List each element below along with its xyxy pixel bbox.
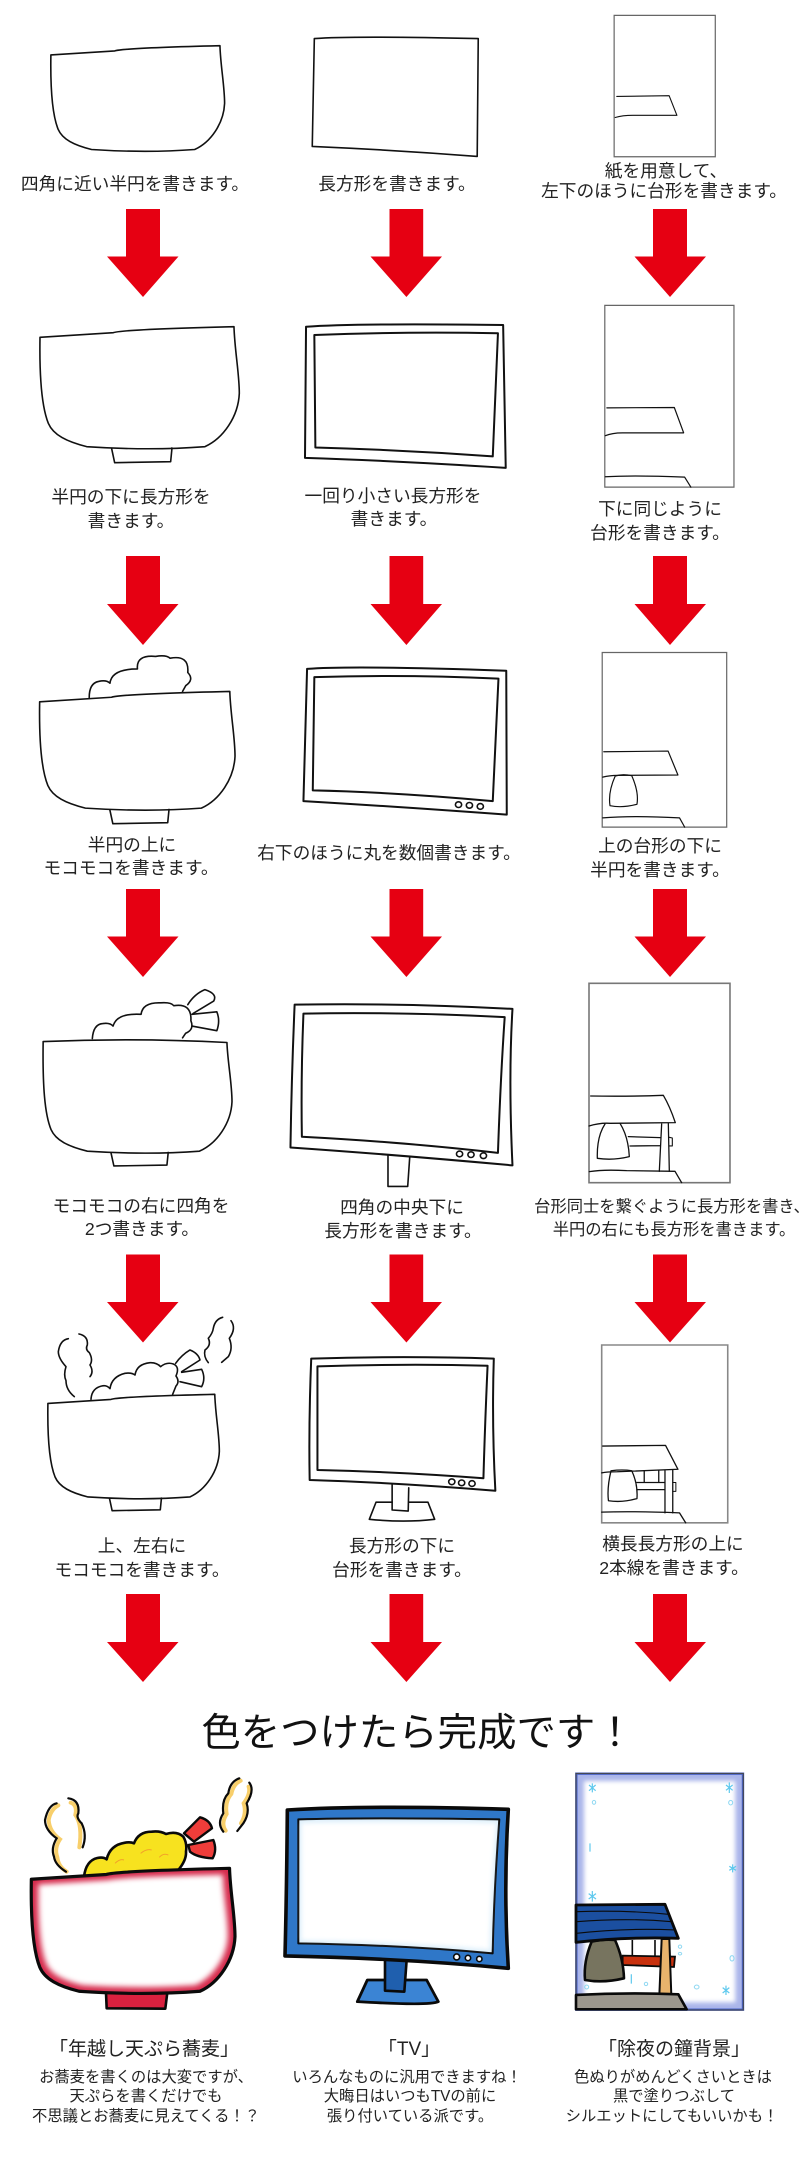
arrow: [634, 1594, 706, 1682]
drawing: bowl and foot: [40, 691, 235, 824]
item description: 天ぷらを書くだけでも: [70, 2088, 222, 2105]
caption: 下に同じように: [598, 499, 722, 519]
step 3: bowl with tempura cloud: [40, 656, 235, 878]
item description: お蕎麦を書くのは大変ですが、: [39, 2069, 253, 2086]
arrow: [634, 1254, 706, 1342]
item title: 「年越し天ぷら蕎麦」: [49, 2038, 239, 2060]
item description: [32, 2069, 260, 2125]
drawing: paper with second trapezoid: [605, 305, 734, 487]
heading: 色をつけたら完成です！: [201, 1711, 635, 1755]
drawing: bowl and foot: [43, 1040, 232, 1166]
caption: [53, 1196, 229, 1239]
caption: [332, 1536, 472, 1580]
caption: [305, 486, 481, 529]
step 5: TV with base: [309, 1357, 495, 1580]
step 1: TV rectangle: [312, 37, 478, 194]
caption: 上の台形の下に: [598, 836, 722, 856]
caption: 長方形を書きます。: [324, 1221, 482, 1241]
arrow: [370, 1254, 442, 1342]
arrow: [107, 1594, 178, 1682]
arrow: [634, 889, 706, 977]
drawing: TV and stand post: [290, 1004, 512, 1186]
drawing: paper, trapezoids, bell: [602, 652, 727, 827]
arrow: [370, 1594, 442, 1682]
drawing: TV with three buttons: [303, 667, 507, 815]
step 3: paper with bell: [590, 652, 730, 880]
step 1: bowl half circle: [21, 46, 249, 194]
caption: 長方形を書きます。: [318, 174, 476, 194]
finished: soba bowl panel: [31, 1778, 260, 2125]
step 4: paper with pillars: [534, 983, 807, 1239]
caption: モコモコを書きます。: [54, 1560, 230, 1580]
item description: 不思議とお蕎麦に見えてくる！？: [32, 2107, 260, 2125]
colored illustration: temple bell background: [576, 1773, 743, 2010]
arrow: [370, 556, 442, 645]
caption: 半円の上に: [88, 835, 176, 855]
caption: [534, 1198, 807, 1239]
caption: 紙を用意して、: [605, 161, 727, 181]
caption: 書きます。: [88, 511, 174, 531]
drawing: rectangle: [312, 37, 478, 156]
caption: [599, 1534, 749, 1578]
arrow: [107, 209, 178, 297]
drawing: belfry outline: [589, 983, 730, 1183]
step 1: paper and trapezoid: [541, 15, 787, 201]
caption: 右下のほうに丸を数個書きます。: [257, 843, 521, 863]
caption: [324, 1198, 482, 1241]
drawing: paper with trapezoid: [614, 15, 715, 157]
caption: 左下のほうに台形を書きます。: [541, 181, 787, 201]
step 4: bowl with shrimp tail: [43, 990, 232, 1239]
caption: [54, 1536, 230, 1580]
caption: 半円の右にも長方形を書きます。: [553, 1221, 795, 1239]
caption: [541, 161, 787, 201]
item description: [566, 2069, 778, 2125]
caption: 上、左右に: [98, 1536, 186, 1556]
drawing: TV, stand and base: [309, 1357, 495, 1521]
step 2: TV inner rectangle: [305, 324, 506, 529]
drawing: bowl and foot: [40, 327, 239, 463]
caption: 書きます。: [351, 509, 437, 529]
caption: 台形同士を繋ぐように長方形を書き、: [534, 1198, 807, 1216]
item description: 黒で塗りつぶして: [613, 2088, 735, 2105]
item description: 色ぬりがめんどくさいときは: [574, 2069, 772, 2086]
drawing: bowl and foot: [48, 1394, 219, 1511]
item description: いろんなものに汎用できますね！: [292, 2069, 522, 2086]
caption: 台形を書きます。: [590, 523, 730, 543]
caption: [590, 499, 730, 543]
drawing: tempura and two tail shapes: [92, 990, 219, 1039]
caption: 横長長方形の上に: [602, 1534, 744, 1554]
step 2: paper two trapezoids: [590, 305, 734, 543]
caption: [51, 487, 211, 531]
arrow: [634, 209, 706, 297]
item title: 「除夜の鐘背景」: [598, 2038, 750, 2060]
caption: [590, 836, 730, 880]
step 4: TV with stand: [290, 1004, 512, 1241]
arrow: [107, 889, 178, 977]
item title: 「TV」: [378, 2038, 440, 2060]
caption: 2つ書きます。: [85, 1219, 199, 1239]
drawing: bowl outline: [51, 46, 225, 151]
caption: 半円の下に長方形を: [51, 487, 211, 507]
step 5: bowl with steam: [48, 1317, 233, 1580]
caption: 2本線を書きます。: [599, 1558, 749, 1578]
drawing: TV double frame: [305, 324, 506, 468]
item description: シルエットにしてもいいかも！: [566, 2108, 778, 2125]
caption: 半円を書きます。: [590, 860, 730, 880]
caption: 台形を書きます。: [332, 1560, 472, 1580]
drawing: tempura, tail and steam: [58, 1317, 233, 1399]
item description: 張り付いている派です。: [327, 2108, 493, 2125]
arrow: [107, 556, 178, 645]
step 5: belfry with roof lines: [599, 1345, 749, 1578]
arrow: [370, 889, 442, 977]
arrow: [107, 1254, 178, 1342]
colored illustration: tempura soba bowl: [31, 1778, 252, 2009]
finished: temple bell panel: [566, 1773, 778, 2125]
caption: モコモコを書きます。: [43, 858, 219, 878]
step 3: TV buttons: [257, 667, 521, 863]
caption: 四角の中央下に: [340, 1198, 464, 1218]
caption: 長方形の下に: [349, 1536, 455, 1556]
step 2: bowl with foot: [40, 327, 239, 531]
caption: [43, 835, 219, 878]
item description: 大晦日はいつもTVの前に: [324, 2088, 496, 2105]
item description: [292, 2069, 522, 2125]
drawing: belfry outline: [602, 1345, 728, 1523]
finished: TV panel: [285, 1807, 522, 2125]
arrow: [634, 556, 706, 645]
drawing: fluffy tempura: [89, 656, 191, 697]
caption: 一回り小さい長方形を: [305, 486, 481, 506]
caption: モコモコの右に四角を: [53, 1196, 229, 1216]
colored illustration: TV: [285, 1807, 508, 2004]
arrow: [370, 209, 442, 297]
caption: 四角に近い半円を書きます。: [21, 174, 249, 194]
